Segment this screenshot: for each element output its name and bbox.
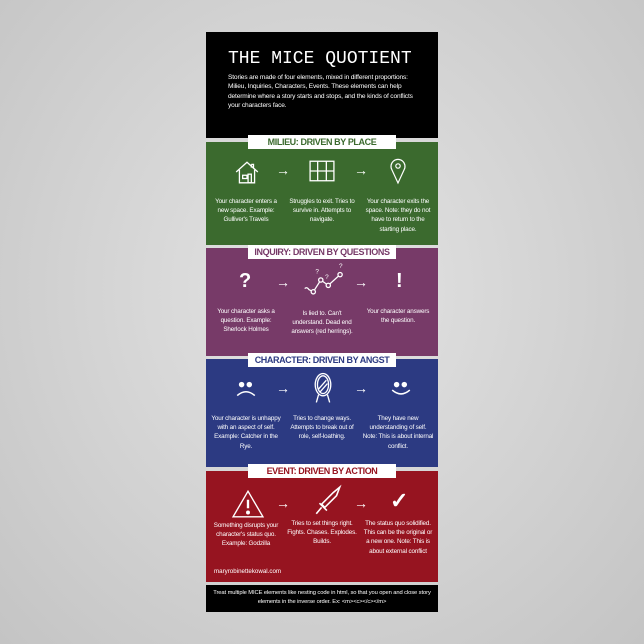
- intro text: Stories are made of four elements, mixed in different proportions: Milieu, Inquiries, Characters, Events. These elements can help determine where a story starts and stops, and the kinds of conflicts your characters face.: [228, 74, 413, 109]
- arrow: →: [276, 274, 290, 290]
- heading: inquiry: INQUIRY: DRIVEN BY QUESTIONS: [254, 247, 390, 257]
- heading: character: CHARACTER: DRIVEN BY ANGST: [255, 355, 389, 365]
- footer text: Treat multiple MICE elements like nesting code in html, so that you open and close story elements in the inverse order. Ex: <m><c></c></m>: [213, 590, 431, 605]
- arrow: →: [354, 274, 368, 290]
- icon: map: [309, 160, 335, 182]
- text: event step 2: Tries to set things right. Fights. Chases. Explodes. Builds.: [287, 520, 357, 545]
- icon: path of questions: [304, 263, 343, 295]
- heading: event: EVENT: DRIVEN BY ACTION: [267, 466, 377, 476]
- icon: house: [236, 162, 258, 184]
- heading: milieu: [248, 135, 396, 149]
- website: maryrobinettekowal.com: [214, 568, 281, 575]
- arrow: →: [354, 380, 368, 396]
- icon: question mark: ?: [239, 270, 251, 292]
- arrow: →: [276, 162, 290, 178]
- icon: exclamation: !: [396, 270, 403, 292]
- panel: footer note: [206, 585, 438, 612]
- icon: path of questions: ?: [339, 263, 343, 270]
- text: milieu step 2: Struggles to exit. Tries to survive in. Attempts to navigate.: [289, 198, 355, 223]
- icon: location pin: [390, 158, 406, 184]
- heading: event: [248, 464, 396, 478]
- heading: milieu: MILIEU: DRIVEN BY PLACE: [268, 137, 376, 147]
- panel: event: [206, 471, 438, 582]
- icon: sad face: [236, 382, 256, 396]
- arrow: →: [354, 495, 368, 511]
- panel: inquiry: [206, 248, 438, 356]
- icon: sword: [316, 484, 342, 514]
- text: character step 1: Your character is unhappy with an aspect of self. Example: Catcher in the Rye.: [211, 415, 281, 450]
- panel: character: [206, 359, 438, 467]
- text: inquiry step 2: Is lied to. Can't understand. Dead end answers (red herrings).: [291, 310, 353, 335]
- text: milieu step 1: Your character enters a new space. Example: Gulliver's Travels: [215, 198, 277, 223]
- heading: character: [248, 353, 396, 367]
- text: character step 2: Tries to change ways. Attempts to break out of role, self-loathing.: [290, 415, 354, 440]
- text: inquiry step 1: Your character asks a question. Example: Sherlock Holmes: [217, 308, 275, 333]
- icon: happy face: [392, 382, 410, 395]
- arrow: →: [276, 380, 290, 396]
- arrow: →: [276, 495, 290, 511]
- text: event step 1: Something disrupts your character's status quo. Example: Godzilla: [214, 522, 278, 547]
- icon: warning: [232, 490, 264, 518]
- icon: path of questions: ?: [315, 269, 319, 276]
- icon: checkmark: ✓: [390, 488, 408, 513]
- icon: mirror: [314, 372, 332, 403]
- text: milieu step 3: Your character exits the space. Note: they do not have to return to the starting place.: [366, 198, 430, 233]
- title: THE MICE QUOTIENT: [228, 49, 412, 69]
- text: inquiry step 3: Your character answers the question.: [367, 308, 429, 324]
- heading: inquiry: [248, 245, 396, 259]
- panel: milieu: [206, 142, 438, 245]
- text: event step 3: The status quo solidified. This can be the original or a new one. Note: This is about external conflict: [364, 520, 432, 555]
- panel: intro: [206, 32, 438, 138]
- arrow: →: [354, 162, 368, 178]
- text: character step 3: They have new understanding of self. Note: This is about internal conflict.: [363, 415, 433, 450]
- icon: path of questions: ?: [325, 274, 329, 281]
